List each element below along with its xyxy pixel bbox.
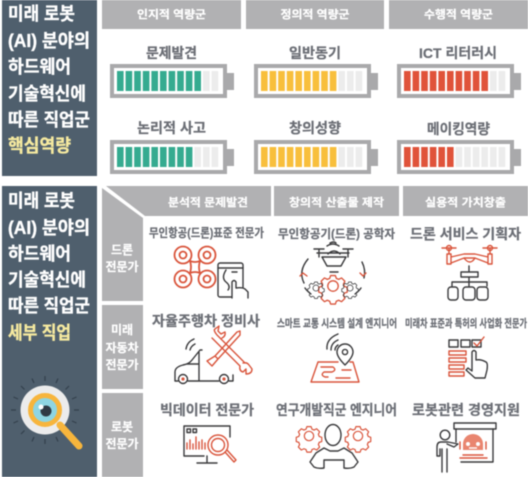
battery: 창의성향 <box>256 120 378 172</box>
job: 로봇관련 경영지원: 로봇관련 경영지원 <box>412 402 520 418</box>
panel: detailed jobs title: (AI) 분야의 <box>8 218 90 238</box>
panel: core competency title <box>2 0 97 176</box>
panel: core competency title: 핵심역량 <box>8 136 71 156</box>
battery: 메이킹역량 <box>399 121 521 172</box>
header: practical value creation <box>403 186 528 216</box>
job: 자율주행차 정비사: 자율주행차 정비사 <box>152 313 260 329</box>
panel: detailed jobs title: 하드웨어 <box>8 244 71 264</box>
header: performance competency <box>389 0 528 29</box>
icon: presenter with robot on screen <box>437 423 496 472</box>
header: performance competency: 수행적 역량군 <box>424 7 493 21</box>
battery: 일반동기 <box>256 45 378 96</box>
row label: 미래 자동차 전문가: 자동차 <box>105 341 139 355</box>
job: 미래차 표준과 특허의 사업화 전문가 <box>405 316 527 378</box>
row label: 미래 자동차 전문가: 미래 <box>111 322 133 337</box>
job: 무인항공기(드론) 공학자 <box>278 226 395 304</box>
job: 무인항공기(드론) 공학자: 무인항공기(드론) 공학자 <box>278 226 395 241</box>
battery: 논리적 사고 <box>112 120 234 172</box>
job: 연구개발직군 엔지니어 <box>276 402 397 468</box>
header: practical value creation: 실용적 가치창출 <box>425 195 506 209</box>
header: affective competency: 정의적 역량군 <box>280 8 350 21</box>
panel: core competency title: 하드웨어 <box>8 57 71 77</box>
panel: detailed jobs title <box>2 186 97 477</box>
row label: 로봇 전문가: 전문가 <box>105 436 139 451</box>
icon: checklist with pointing hand <box>449 337 487 378</box>
panel: detailed jobs title: 기술혁신에 <box>8 270 86 290</box>
battery: ICT 리터러시 <box>399 45 521 96</box>
header: cognitive competency <box>102 0 241 29</box>
panel: detailed jobs title: 미래 로봇 <box>8 191 75 211</box>
job: 빅데이터 전문가 <box>160 402 254 463</box>
panel: detailed jobs title: 따른 직업군 <box>8 296 90 316</box>
row label: 미래 자동차 전문가: 전문가 <box>105 357 139 372</box>
icon: map with location pin <box>311 334 359 382</box>
row label: 드론 전문가 <box>102 188 143 301</box>
row label: 로봇 전문가: 로봇 <box>111 420 133 434</box>
header: analytical problem finding <box>106 186 271 216</box>
icon: monitor with magnifier chart <box>184 426 236 463</box>
job: 자율주행차 정비사 <box>152 313 260 384</box>
job: 무인항공(드론)표준 전문가: 무인항공(드론)표준 전문가 <box>149 225 264 240</box>
panel: detailed jobs title: 세부 직업 <box>8 323 71 343</box>
job: 스마트 교통 시스템 설계 엔지니어 <box>277 316 397 382</box>
row label: 로봇 전문가 <box>102 393 143 477</box>
battery: 창의성향: 창의성향 <box>289 120 341 136</box>
panel: core competency title: 기술혁신에 <box>8 84 86 104</box>
battery: ICT 리터러시: ICT 리터러시 <box>419 45 497 61</box>
header: cognitive competency: 인지적 역량군 <box>137 8 206 21</box>
icon: magnifying glass with eye <box>11 376 79 446</box>
battery: 논리적 사고: 논리적 사고 <box>137 120 206 136</box>
job: 무인항공(드론)표준 전문가 <box>149 225 264 298</box>
header: analytical problem finding: 분석적 문제발견 <box>168 195 248 209</box>
header: affective competency <box>246 0 384 29</box>
header: creative output <box>274 186 399 216</box>
job: 스마트 교통 시스템 설계 엔지니어: 스마트 교통 시스템 설계 엔지니어 <box>277 316 397 330</box>
job: 빅데이터 전문가: 빅데이터 전문가 <box>160 402 254 418</box>
battery: 메이킹역량: 메이킹역량 <box>427 121 490 137</box>
job: 연구개발직군 엔지니어: 연구개발직군 엔지니어 <box>276 402 397 418</box>
icon: drone and tablet <box>174 246 248 298</box>
row label: 드론 전문가: 전문가 <box>105 259 139 274</box>
icon: drone and org chart <box>442 246 497 300</box>
job: 드론 서비스 기획자 <box>410 226 521 300</box>
header: creative output: 창의적 산출물 제작 <box>289 195 384 209</box>
icon: car and tools <box>175 326 252 384</box>
battery: 일반동기: 일반동기 <box>289 45 341 61</box>
panel: core competency title: (AI) 분야의 <box>8 31 90 51</box>
battery: 문제발견 <box>112 45 234 96</box>
panel: core competency title: 따른 직업군 <box>8 110 90 130</box>
icon: person with gears <box>296 424 371 468</box>
panel: core competency title: 미래 로봇 <box>8 4 75 24</box>
job: 로봇관련 경영지원 <box>412 402 520 472</box>
row label: 미래 자동차 전문가 <box>102 305 143 389</box>
battery: 문제발견: 문제발견 <box>146 45 197 61</box>
job: 드론 서비스 기획자: 드론 서비스 기획자 <box>410 226 521 242</box>
row label: 드론 전문가: 드론 <box>111 243 133 257</box>
icon: drone with gears <box>300 242 366 304</box>
